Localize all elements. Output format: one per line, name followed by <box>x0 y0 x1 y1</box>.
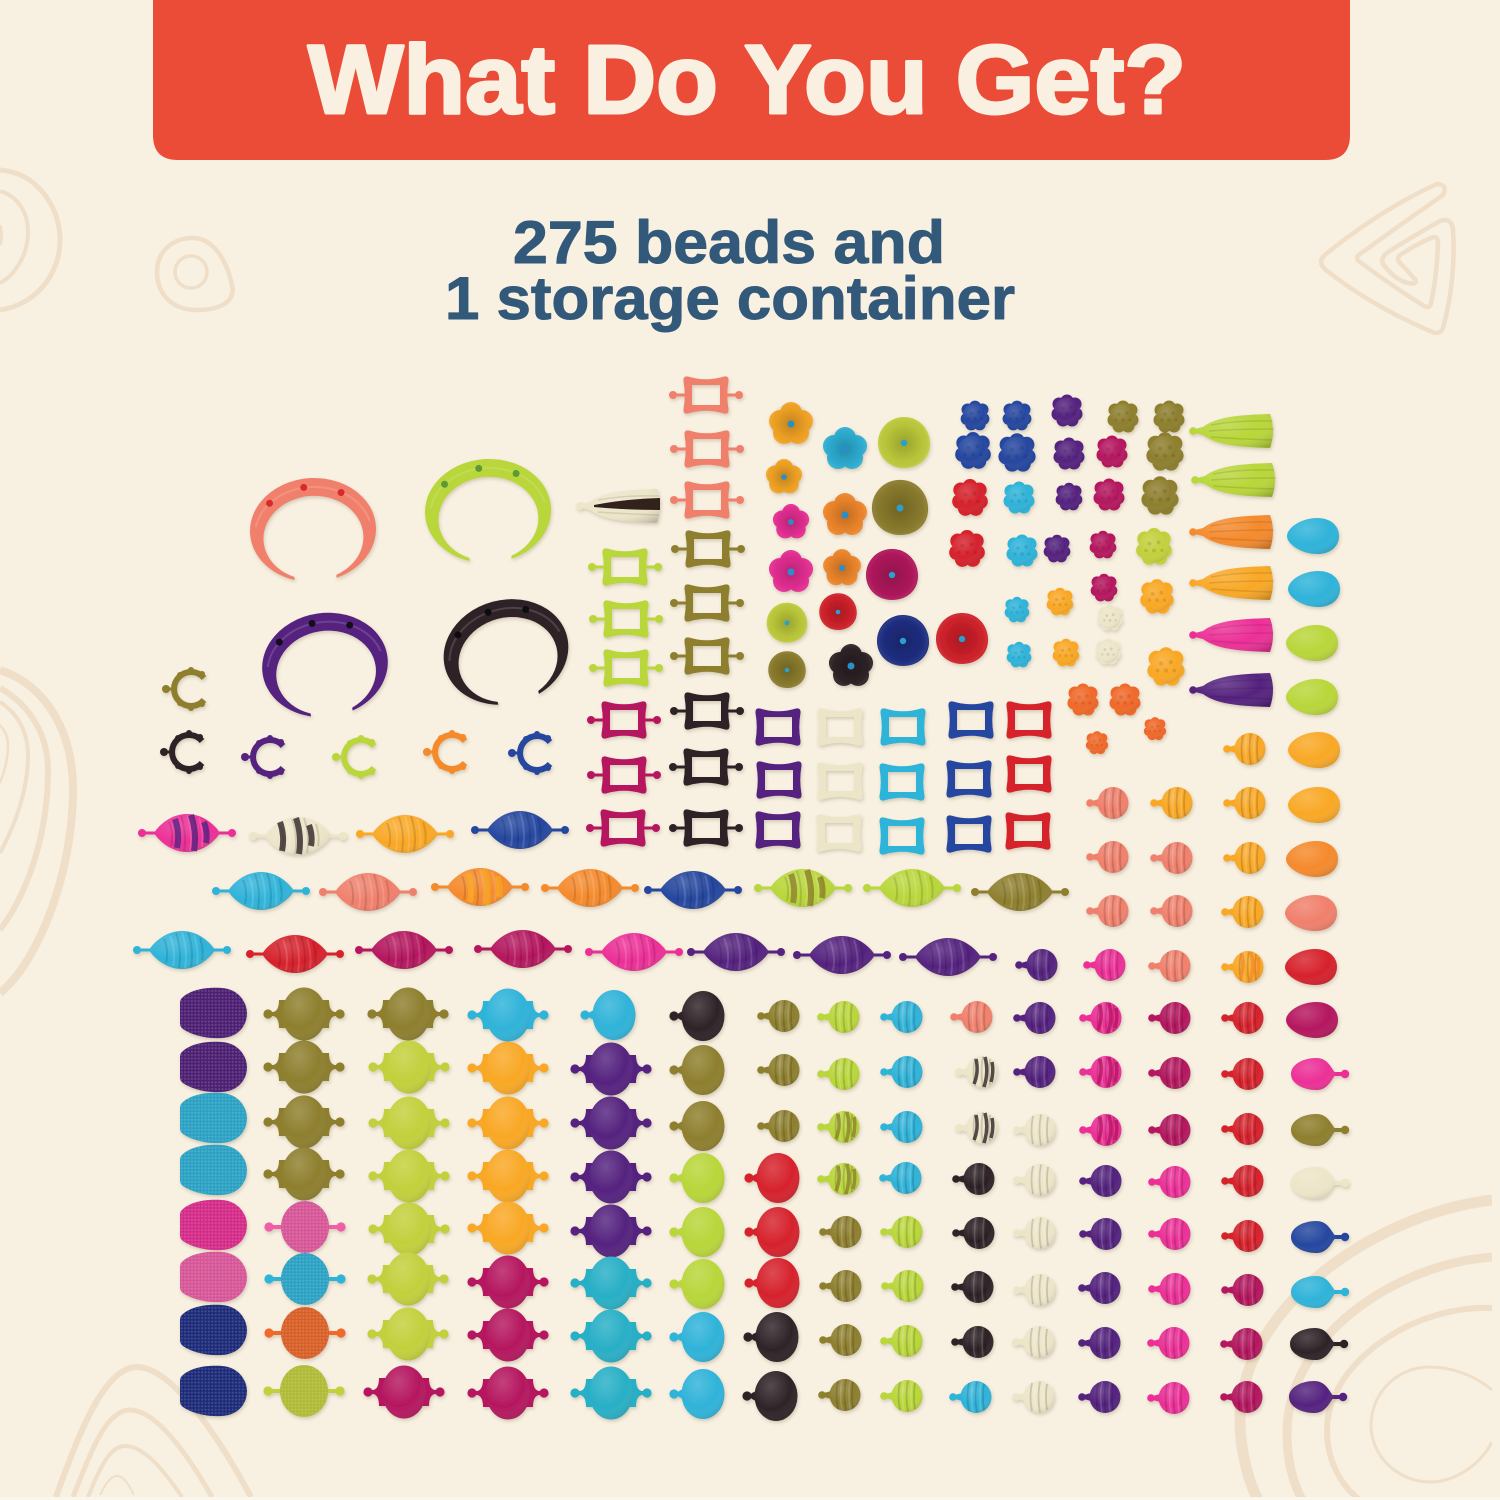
acorn beads with knob on right <box>1289 1058 1349 1413</box>
small ribbed beads grid, bottom right <box>757 1000 1264 1414</box>
berry cluster beads <box>949 394 1185 754</box>
crescent bangles <box>247 456 580 722</box>
smooth cup caps <box>767 417 988 688</box>
subtitle: 275 beads and <box>513 209 945 276</box>
subtitle: 1 storage container <box>445 265 1015 332</box>
knobbed square links <box>586 376 745 847</box>
textured egg beads column <box>180 988 247 1416</box>
flower caps <box>766 402 873 687</box>
title banner <box>153 0 1350 160</box>
cream long spike bead <box>576 489 661 523</box>
product layout: all beads <box>133 376 1349 1421</box>
subtitle <box>445 209 1015 332</box>
small ribbed beads, upper right <box>1015 733 1266 983</box>
square links without knobs <box>755 701 1052 855</box>
double-knob flanged and textured round beads <box>263 988 652 1420</box>
C-shaped clasps <box>160 667 551 779</box>
title banner: What Do You Get? <box>308 25 1186 134</box>
ribbed lemon beads, three rows <box>133 811 1069 976</box>
smooth egg beads column <box>1285 518 1340 1038</box>
long spike beads <box>1189 414 1276 707</box>
single-knob smooth round beads <box>580 990 800 1421</box>
